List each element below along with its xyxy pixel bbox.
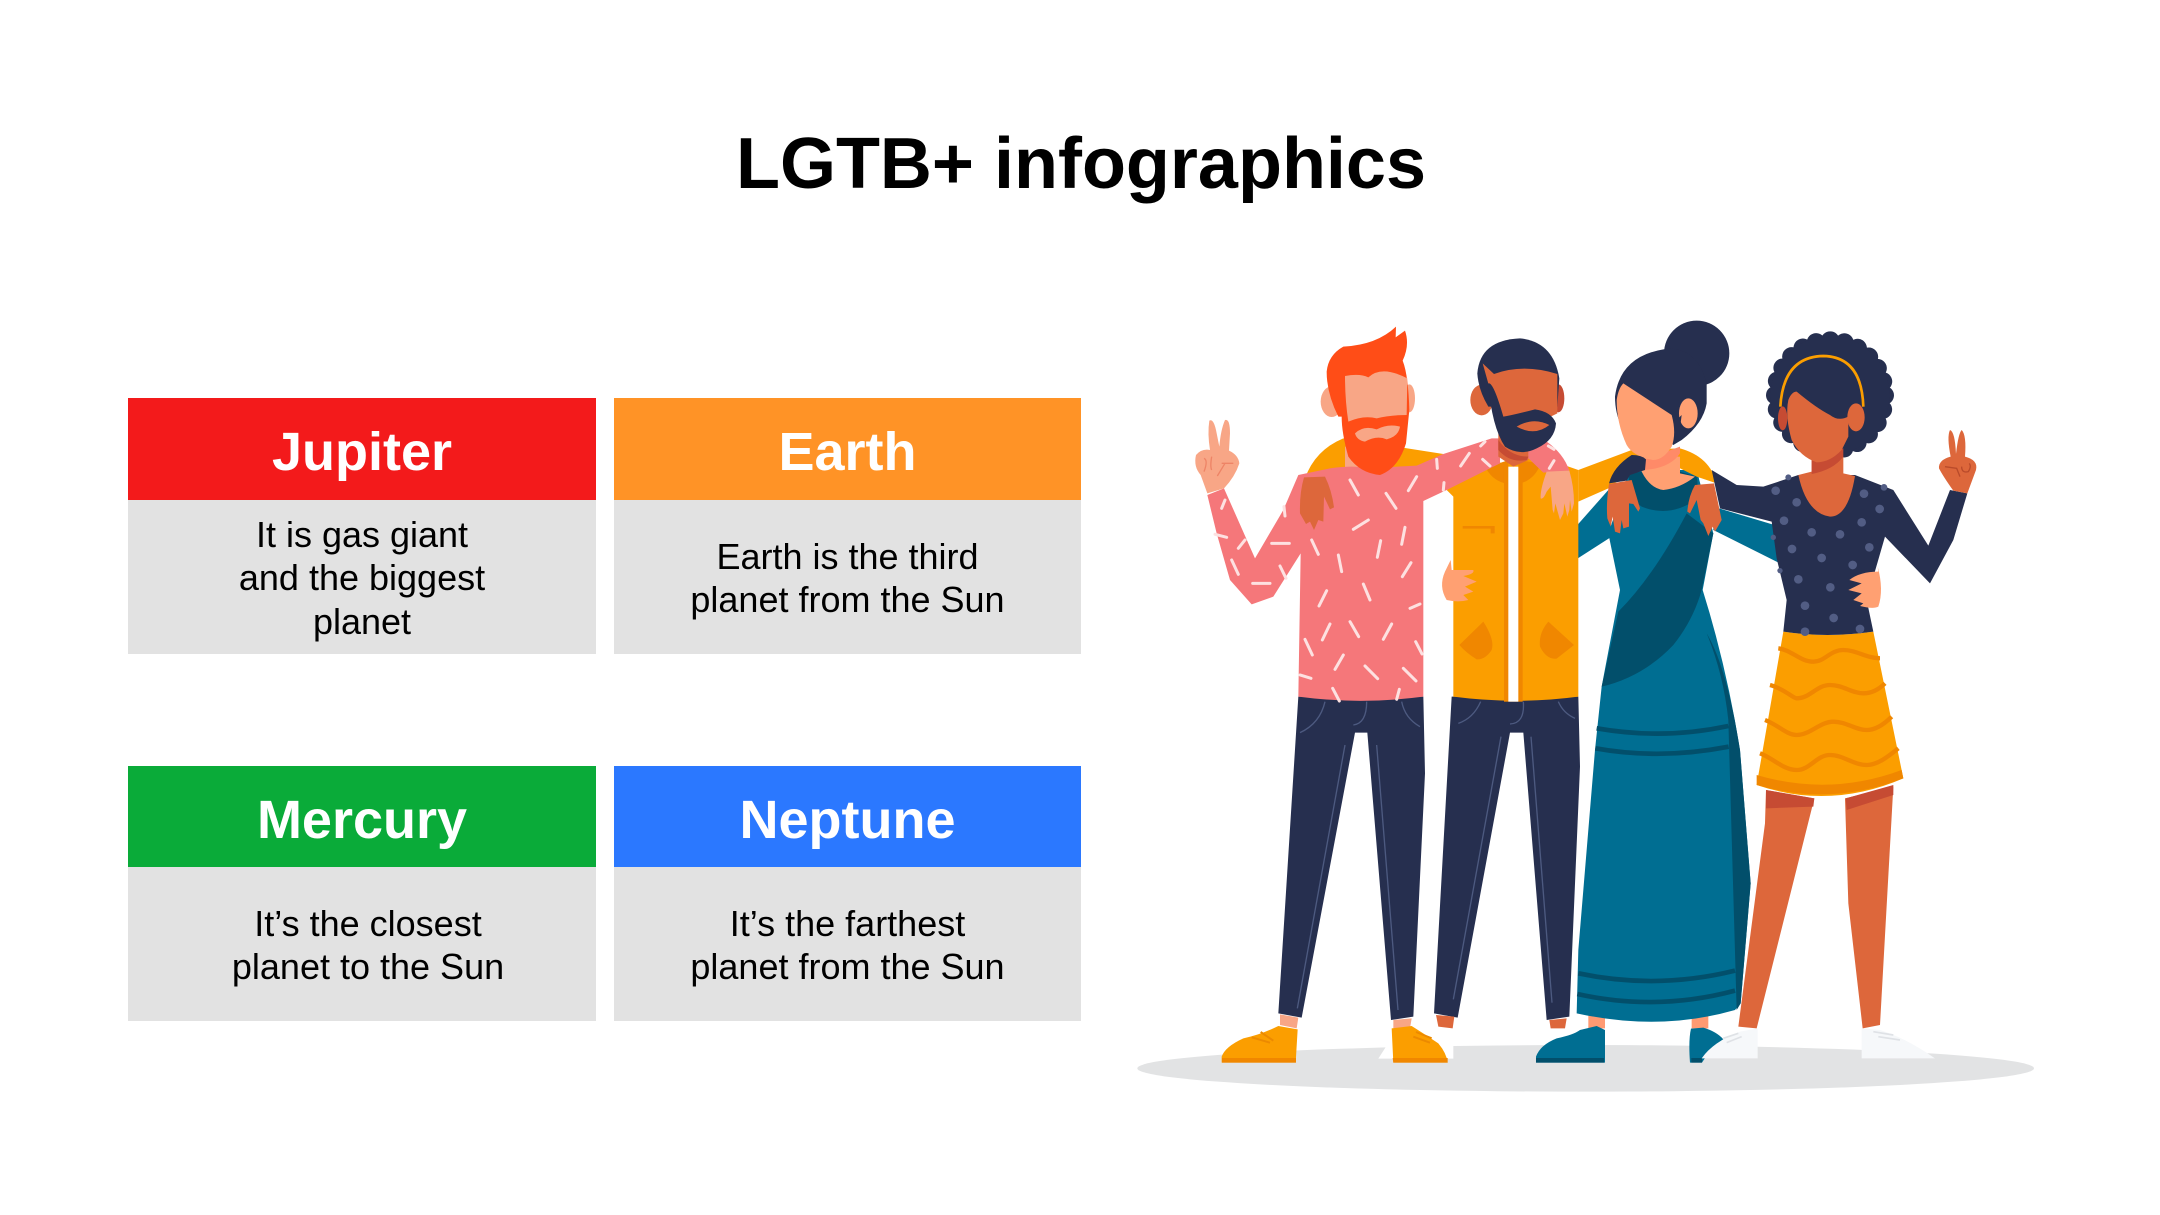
Jupiter description: planet xyxy=(313,601,411,642)
left arm xyxy=(1570,490,1612,563)
skirt waves xyxy=(1760,648,1898,770)
hand: on woman's left shoulder xyxy=(1607,480,1640,533)
Jupiter header xyxy=(128,398,596,500)
Jupiter description: It is gas giant xyxy=(256,514,468,555)
face xyxy=(1787,392,1848,462)
trouser seams xyxy=(1297,702,1420,1010)
neck xyxy=(1345,447,1377,470)
hand: on woman's right shoulder xyxy=(1687,483,1722,536)
face xyxy=(1483,363,1557,433)
dress xyxy=(1577,470,1751,1022)
face xyxy=(1345,371,1407,422)
dress dark edge xyxy=(1707,633,1751,1010)
white sneakers xyxy=(1702,1028,1935,1058)
neck xyxy=(1798,457,1855,517)
panel: Earth xyxy=(614,398,1081,654)
polka dots xyxy=(1771,474,1887,636)
top xyxy=(1712,470,1967,635)
Earth header xyxy=(614,398,1081,500)
Mercury header: Mercury xyxy=(257,790,467,850)
ground shadow xyxy=(1137,1045,2034,1092)
ankles xyxy=(1436,1015,1567,1028)
panel: Mercury xyxy=(128,766,596,1021)
sweater sleeve right xyxy=(1527,442,1569,473)
figure: woman with polka dot top xyxy=(1712,336,1976,1028)
sweater confetti xyxy=(1215,442,1554,701)
ears xyxy=(1470,385,1493,415)
skirt hem xyxy=(1757,770,1903,794)
ear xyxy=(1679,398,1698,428)
Mercury description xyxy=(128,867,596,1021)
hair xyxy=(1477,338,1559,407)
sneaker laces xyxy=(1723,1032,1900,1043)
panel: Neptune xyxy=(614,766,1081,1021)
neck xyxy=(1498,433,1528,467)
panel: Jupiter xyxy=(128,398,596,654)
headband xyxy=(1780,356,1863,407)
hand: on man's waist xyxy=(1442,560,1477,601)
Neptune header xyxy=(614,766,1081,867)
title: LGTB+ infographics xyxy=(736,124,1426,204)
Mercury header xyxy=(128,766,596,867)
hair and beard xyxy=(1327,327,1409,475)
ankles xyxy=(1280,1014,1412,1028)
hand: on man's left shoulder xyxy=(1300,477,1334,530)
Neptune description xyxy=(614,867,1081,1021)
long arm behind woman xyxy=(1578,448,1717,502)
teal shoes xyxy=(1536,1026,1723,1063)
hand: on man's shoulder xyxy=(1541,471,1574,520)
mouth xyxy=(1517,421,1549,431)
chest pocket xyxy=(1463,526,1495,533)
head: woman in teal dress xyxy=(1615,321,1729,490)
Earth description: planet from the Sun xyxy=(690,579,1005,620)
pockets xyxy=(1459,622,1574,659)
beard xyxy=(1488,383,1556,452)
orange arm around shoulders xyxy=(1305,438,1443,478)
Mercury description: It’s the closest xyxy=(254,903,482,944)
vest xyxy=(1447,457,1578,701)
hair wisp xyxy=(1670,415,1682,445)
thigh shadow xyxy=(1766,785,1893,810)
head: man in yellow vest xyxy=(1470,338,1564,467)
illustration: group of four friends xyxy=(1137,321,2034,1092)
mouth xyxy=(1355,425,1400,442)
ankles xyxy=(1588,1013,1708,1028)
trouser seams xyxy=(1453,702,1575,1003)
dress collar xyxy=(1628,472,1697,511)
sash xyxy=(1602,513,1713,687)
raised hand xyxy=(1195,420,1239,493)
Neptune description: It’s the farthest xyxy=(730,903,965,944)
hair bun xyxy=(1664,321,1729,386)
legs xyxy=(1278,697,1425,1020)
collar xyxy=(1486,460,1541,484)
orange shoes xyxy=(1222,1026,1448,1063)
raised hand xyxy=(1939,430,1976,493)
figure: woman in teal dress xyxy=(1536,470,1780,1063)
figure: man in pink sweater xyxy=(1195,327,1569,1063)
Earth description: Earth is the third xyxy=(716,536,979,577)
Neptune header: Neptune xyxy=(740,790,956,850)
Earth description xyxy=(614,500,1081,654)
figure: man in yellow vest xyxy=(1378,448,1717,1059)
hand: on polka top waist xyxy=(1848,567,1881,608)
left ear xyxy=(1778,406,1787,430)
face xyxy=(1617,383,1674,460)
left ear xyxy=(1321,386,1343,417)
right ear xyxy=(1847,403,1865,431)
zip stripe xyxy=(1504,467,1523,702)
skirt xyxy=(1757,632,1903,796)
right ear xyxy=(1404,384,1415,412)
Jupiter description xyxy=(128,500,596,654)
legs xyxy=(1434,697,1580,1020)
Mercury description: planet to the Sun xyxy=(232,946,504,987)
hair xyxy=(1615,349,1707,445)
dress stripes xyxy=(1577,726,1735,1002)
neck xyxy=(1642,457,1695,490)
Jupiter header: Jupiter xyxy=(272,422,452,482)
legs xyxy=(1738,787,1893,1028)
white shoe xyxy=(1378,1028,1453,1059)
hair xyxy=(1775,341,1885,450)
Jupiter description: and the biggest xyxy=(239,557,485,598)
Earth header: Earth xyxy=(778,422,917,482)
sweater body and arms xyxy=(1207,438,1500,701)
Neptune description: planet from the Sun xyxy=(690,946,1005,987)
woman's sleeve behind neck xyxy=(1609,455,1646,483)
right arm xyxy=(1713,507,1780,563)
